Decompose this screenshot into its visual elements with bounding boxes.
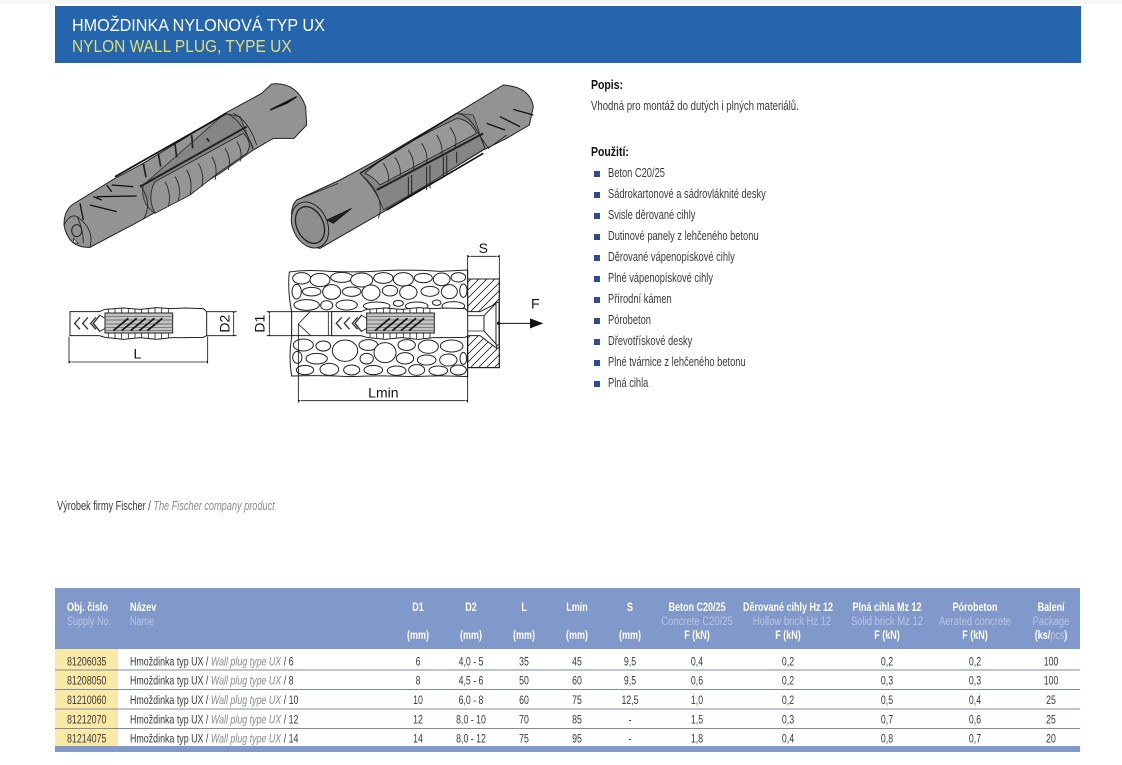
dimension Lmin xyxy=(298,324,468,403)
usage list: Dřevotřískové desky xyxy=(608,335,693,348)
row 81208050: 50 xyxy=(519,674,529,688)
dimension S xyxy=(468,240,499,279)
table header xyxy=(55,588,1080,649)
row 81210060 xyxy=(67,694,1056,707)
row 81214075: 20 xyxy=(1046,732,1056,746)
page top strip xyxy=(0,0,1122,4)
row 81214075: 0,8 xyxy=(881,732,893,746)
row 81214075: - xyxy=(629,732,632,746)
row 81210060: 0,4 xyxy=(969,694,981,707)
table header: Obj. číslo xyxy=(67,601,108,614)
force arrow F: F xyxy=(531,296,540,312)
row 81208050: 0,3 xyxy=(969,674,981,688)
row 81210060: 12,5 xyxy=(622,694,639,707)
table header: Název xyxy=(130,601,156,614)
table header: (mm) xyxy=(619,629,641,642)
row 81208050: 0,2 xyxy=(782,674,794,688)
usage list: Sádrokartonové a sádrovláknité desky xyxy=(608,188,766,201)
header banner xyxy=(55,6,1081,63)
table header: (ks/pcs) xyxy=(1035,629,1067,642)
row 81212070: 8,0 - 10 xyxy=(456,713,486,727)
row 81210060: 1,0 xyxy=(691,694,703,707)
table header: Balení xyxy=(1038,601,1066,614)
table header: Supply No. xyxy=(67,615,111,628)
table header: Plná cihla Mz 12 xyxy=(853,601,922,614)
usage list: Děrované vápenopískové cihly xyxy=(608,251,735,264)
row 81208050: 100 xyxy=(1044,674,1058,688)
row 81212070 xyxy=(67,713,1056,727)
table header: Package xyxy=(1033,615,1069,628)
row separators xyxy=(55,670,1080,728)
table header: F (kN) xyxy=(874,629,900,642)
table header: F (kN) xyxy=(962,629,988,642)
usage list: Svisle děrované cihly xyxy=(608,209,696,222)
row 81212070: 81212070 xyxy=(67,713,107,727)
row 81210060: Hmoždinka typ UX / Wall plug type UX / 10 xyxy=(130,694,299,707)
row 81212070: 85 xyxy=(572,713,582,727)
dimension D1 xyxy=(252,312,292,336)
row 81212070: 0,6 xyxy=(969,713,981,727)
row 81214075: 0,7 xyxy=(969,732,981,746)
row 81208050 xyxy=(67,674,1058,688)
dimension S: S xyxy=(479,240,488,256)
table header: S xyxy=(627,601,633,614)
title: Czech: HMOŽDINKA NYLONOVÁ TYP UX xyxy=(72,15,325,35)
description block xyxy=(591,79,799,113)
row 81208050: Hmoždinka typ UX / Wall plug type UX / 8 xyxy=(130,674,294,688)
row 81210060: 6,0 - 8 xyxy=(459,694,484,707)
force arrow F xyxy=(497,296,543,328)
row 81214075: 1,8 xyxy=(691,732,703,746)
row 81208050: 0,6 xyxy=(691,674,703,688)
table header: Solid brick Mz 12 xyxy=(851,615,923,628)
usage list xyxy=(591,146,766,390)
usage list: Beton C20/25 xyxy=(608,167,665,180)
table header: (mm) xyxy=(566,629,588,642)
row 81214075: 81214075 xyxy=(67,732,107,746)
row 81206035: 6 xyxy=(416,655,421,669)
row 81212070: 12 xyxy=(413,713,423,727)
row 81212070: 0,3 xyxy=(782,713,794,727)
title: English: NYLON WALL PLUG, TYPE UX xyxy=(72,36,292,56)
dimension D1: D1 xyxy=(252,315,268,333)
row 81210060: 0,5 xyxy=(881,694,893,707)
row 81212070: 1,5 xyxy=(691,713,703,727)
drawing: plug installed in masonry with dimensions xyxy=(252,240,543,403)
heading: Popis: Popis: xyxy=(591,79,623,92)
usage list: Dutinové panely z lehčeného betonu xyxy=(608,230,759,243)
table header: F (kN) xyxy=(775,629,801,642)
row 81206035: 4,0 - 5 xyxy=(459,655,484,669)
row 81212070: 70 xyxy=(519,713,529,727)
row 81208050: 9,5 xyxy=(624,674,636,688)
row 81214075: 14 xyxy=(413,732,423,746)
table header: Hollow brick Hz 12 xyxy=(753,615,831,628)
heading: Použití: Použití: xyxy=(591,146,629,159)
row 81206035: 0,2 xyxy=(969,655,981,669)
row 81206035: 35 xyxy=(519,655,529,669)
table header: Aerated concrete xyxy=(939,615,1011,628)
row 81206035: 81206035 xyxy=(67,655,107,669)
row 81214075: 8,0 - 12 xyxy=(456,732,486,746)
table footer bar xyxy=(55,746,1080,752)
row 81210060: 75 xyxy=(572,694,582,707)
row 81214075: Hmoždinka typ UX / Wall plug type UX / 14 xyxy=(130,732,299,746)
table header: (mm) xyxy=(460,629,482,642)
product table xyxy=(55,588,1080,752)
row 81208050: 8 xyxy=(416,674,421,688)
supply number highlight xyxy=(55,649,118,746)
row 81212070: 0,7 xyxy=(881,713,893,727)
row 81210060: 0,2 xyxy=(782,694,794,707)
table header: F (kN) xyxy=(684,629,710,642)
row 81214075: 95 xyxy=(572,732,582,746)
usage list: Plné vápenopískové cihly xyxy=(608,272,713,285)
row 81210060: 25 xyxy=(1046,694,1056,707)
usage list: Přírodní kámen xyxy=(608,293,672,306)
row 81208050: 0,3 xyxy=(881,674,893,688)
table header: D1 xyxy=(412,601,424,614)
dimension L: L xyxy=(133,345,141,361)
table header: Concrete C20/25 xyxy=(661,615,733,628)
row 81206035: 100 xyxy=(1044,655,1058,669)
dimension L xyxy=(72,345,205,362)
dimension D2: D2 xyxy=(216,315,232,333)
row 81206035: 0,2 xyxy=(782,655,794,669)
row 81212070: - xyxy=(629,713,632,727)
masonry xyxy=(289,270,468,377)
plug in hole xyxy=(332,308,468,339)
table header: D2 xyxy=(465,601,477,614)
row 81206035: Hmoždinka typ UX / Wall plug type UX / 6 xyxy=(130,655,294,669)
table header: Lmin xyxy=(566,601,588,614)
manufacturer note: Výrobek firmy Fischer / The Fischer company product xyxy=(57,500,275,513)
row 81212070: 25 xyxy=(1046,713,1056,727)
usage list: Plné tvárnice z lehčeného betonu xyxy=(608,356,746,369)
row 81206035: 0,2 xyxy=(881,655,893,669)
row 81212070: Hmoždinka typ UX / Wall plug type UX / 12 xyxy=(130,713,299,727)
table header: (mm) xyxy=(513,629,535,642)
description text: Vhodná pro montáž do dutých i plných materiálů. xyxy=(591,100,799,113)
fixture block xyxy=(468,279,499,368)
dimension Lmin: Lmin xyxy=(368,385,398,401)
table header: Děrované cihly Hz 12 xyxy=(743,601,833,614)
drill hole xyxy=(292,312,468,336)
row 81208050: 60 xyxy=(572,674,582,688)
table header: Name xyxy=(130,615,154,628)
drawing: plug perspective, closed end xyxy=(64,84,307,247)
usage list: Plná cihla xyxy=(608,377,649,390)
row 81210060: 81210060 xyxy=(67,694,107,707)
drawing: plug side view with dimensions xyxy=(69,308,237,363)
table header: L xyxy=(521,601,527,614)
table header: Pórobeton xyxy=(953,601,997,614)
row 81214075: 0,4 xyxy=(782,732,794,746)
usage list: Pórobeton xyxy=(608,314,651,327)
table header: (mm) xyxy=(407,629,429,642)
technical drawings xyxy=(64,84,543,403)
row 81208050: 4,5 - 6 xyxy=(459,674,484,688)
row 81206035: 9,5 xyxy=(624,655,636,669)
row 81208050: 81208050 xyxy=(67,674,107,688)
row 81214075 xyxy=(67,732,1056,746)
drawing: plug perspective, open end xyxy=(284,85,533,254)
table header: Beton C20/25 xyxy=(669,601,726,614)
row 81206035: 45 xyxy=(572,655,582,669)
row 81214075: 75 xyxy=(519,732,529,746)
row 81206035 xyxy=(67,655,1058,669)
row 81210060: 60 xyxy=(519,694,529,707)
row 81210060: 10 xyxy=(413,694,423,707)
row 81206035: 0,4 xyxy=(691,655,703,669)
